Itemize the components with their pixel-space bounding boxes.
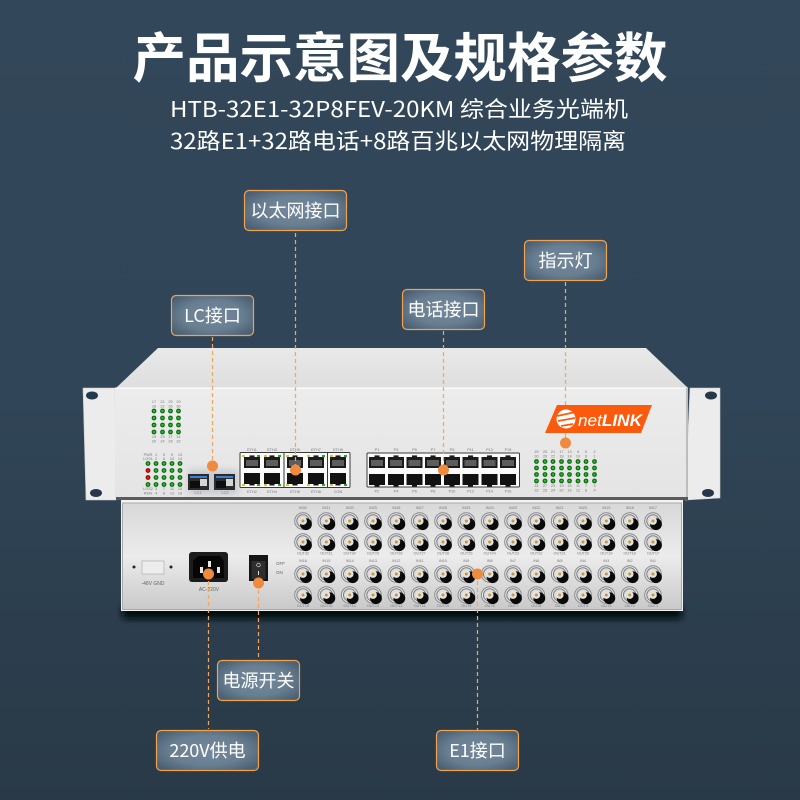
indicator group: right: 29 bbox=[534, 450, 539, 454]
indicator group: upper left: 22 bbox=[160, 404, 165, 408]
telephone ports: P5 bbox=[412, 448, 417, 452]
BNC E1 connectors: IN28 bbox=[392, 506, 400, 510]
LC optical ports: LC2 bbox=[222, 491, 228, 495]
BNC E1 connectors: IN27 bbox=[416, 506, 424, 510]
indicator group: right: 17 bbox=[559, 450, 564, 454]
indicator group: upper left: 21 bbox=[160, 400, 165, 404]
indicator group: right: 11 bbox=[576, 484, 580, 488]
indicator group: upper left: 27 bbox=[168, 435, 173, 439]
BNC E1 connectors: IN9 bbox=[463, 559, 469, 563]
BNC E1 connectors: IN25 bbox=[462, 506, 470, 510]
indicator group: upper left: 31 bbox=[176, 435, 181, 439]
indicator group: upper left: 32 bbox=[176, 440, 181, 444]
BNC E1 connectors: OUT27 bbox=[414, 552, 426, 556]
device shadow bbox=[122, 606, 682, 619]
BNC E1 connectors: IN14 bbox=[346, 559, 354, 563]
BNC E1 connectors: OUT20 bbox=[577, 552, 589, 556]
BNC E1 connectors: IN13 bbox=[369, 559, 377, 563]
ethernet ports: ETH7 bbox=[311, 448, 321, 452]
indicator group: lower left: 7 bbox=[163, 487, 165, 491]
callout: E1接口: E1接口 bbox=[449, 737, 506, 763]
indicator group: upper left: 29 bbox=[176, 400, 181, 404]
telephone ports: P8 bbox=[431, 490, 435, 494]
indicator group: right: 19 bbox=[559, 484, 564, 488]
telephone ports: P11 bbox=[467, 448, 474, 452]
BNC E1 connectors: OUT9 bbox=[461, 604, 471, 608]
indicator group: right: 7 bbox=[585, 484, 587, 488]
BNC E1 connectors: OUT15 bbox=[320, 604, 332, 608]
ethernet ports: ETH4 bbox=[267, 490, 277, 494]
callout: 电源开关: 电源开关 bbox=[222, 667, 294, 693]
leader: 电话接口 bbox=[438, 331, 449, 476]
BNC E1 connectors: IN20 bbox=[579, 506, 587, 510]
indicator group: lower left bbox=[143, 453, 182, 496]
indicator group: upper left: 30 bbox=[176, 404, 181, 408]
indicator group: right bbox=[534, 450, 597, 492]
BNC E1 connectors: IN26 bbox=[439, 506, 447, 510]
BNC E1 connectors: IN18 bbox=[626, 506, 634, 510]
indicator group: upper left: 17 bbox=[152, 400, 156, 404]
indicator group: right: 27 bbox=[543, 484, 547, 488]
telephone ports: P13 bbox=[486, 448, 493, 452]
telephone ports: P12 bbox=[467, 490, 474, 494]
BNC E1 connectors: OUT18 bbox=[624, 552, 636, 556]
BNC E1 connectors: IN32 bbox=[299, 506, 307, 510]
ethernet ports: ETH1 bbox=[247, 448, 257, 452]
AC power socket: AC-220V bbox=[199, 587, 220, 593]
BNC E1 connectors: OUT8 bbox=[485, 604, 495, 608]
indicator group: right: 30 bbox=[534, 454, 539, 458]
indicator group: lower left: 1 bbox=[155, 453, 157, 457]
ethernet ports: CON bbox=[334, 490, 342, 494]
BNC E1 connectors: OUT16 bbox=[297, 604, 309, 608]
BNC E1 connectors: IN4 bbox=[580, 559, 586, 563]
rocker switch: ON bbox=[276, 570, 283, 575]
indicator group: lower left: 14 bbox=[178, 457, 182, 461]
indicator group: right: 31 bbox=[534, 484, 539, 488]
telephone ports: P9 bbox=[450, 448, 454, 452]
BNC E1 connectors: IN22 bbox=[532, 506, 540, 510]
BNC E1 connectors: IN29 bbox=[369, 506, 377, 510]
indicator group: lower left: 9 bbox=[171, 453, 173, 457]
indicator group: right: 20 bbox=[559, 488, 564, 492]
BNC E1 connectors: IN31 bbox=[322, 506, 330, 510]
callout: 电源开关 bbox=[218, 660, 300, 700]
indicator group: upper left: 24 bbox=[160, 440, 165, 444]
BNC E1 connectors: OUT23 bbox=[507, 552, 519, 556]
ethernet ports bbox=[240, 448, 350, 494]
leader: 220V供电 bbox=[203, 568, 214, 729]
indicator group: upper left: 28 bbox=[168, 440, 173, 444]
AC power socket bbox=[189, 552, 228, 593]
LC optical ports: LC1 bbox=[195, 491, 201, 495]
subtitle: model: HTB-32E1-32P8FEV-20KM 综合业务光端机 bbox=[170, 92, 628, 124]
indicator group: right: 12 bbox=[576, 488, 580, 492]
BNC E1 connectors: IN7 bbox=[510, 559, 516, 563]
BNC E1 connectors: IN17 bbox=[649, 506, 657, 510]
indicator group: lower left: LOS2 bbox=[143, 487, 153, 491]
indicator group: lower left: 5 bbox=[163, 453, 165, 457]
BNC E1 connectors: OUT26 bbox=[437, 552, 449, 556]
indicator group: lower left: LOS1 bbox=[143, 457, 153, 461]
callout: 指示灯 bbox=[524, 240, 606, 280]
right rack ear bbox=[685, 388, 720, 500]
BNC E1 connectors: IN6 bbox=[533, 559, 539, 563]
BNC E1 connectors: OUT12 bbox=[390, 604, 402, 608]
indicator group: upper left: 20 bbox=[152, 440, 156, 444]
indicator group: right: 14 bbox=[567, 454, 572, 458]
BNC E1 connectors: OUT1 bbox=[648, 604, 658, 608]
telephone ports: P16 bbox=[505, 490, 511, 494]
BNC E1 connectors: OUT3 bbox=[601, 604, 611, 608]
callout: 电话接口: 电话接口 bbox=[408, 296, 480, 322]
telephone ports: P4 bbox=[394, 490, 398, 494]
indicator group: lower left: RUN bbox=[144, 492, 152, 496]
indicator group: right: 6 bbox=[585, 454, 587, 458]
BNC E1 connectors: OUT2 bbox=[625, 604, 635, 608]
BNC E1 connectors: OUT30 bbox=[344, 552, 356, 556]
indicator group: lower left: PWR bbox=[144, 453, 153, 457]
power terminal: -48V GND: -48V GND bbox=[141, 581, 165, 587]
BNC E1 connectors: IN2 bbox=[627, 559, 633, 563]
callout: 以太网接口 bbox=[244, 190, 346, 230]
power terminal: -48V GND bbox=[132, 561, 172, 587]
BNC E1 connectors: IN15 bbox=[322, 559, 330, 563]
device top cover bbox=[116, 348, 688, 388]
telephone ports: P7 bbox=[431, 448, 435, 452]
telephone ports: P6 bbox=[412, 490, 417, 494]
callout: 220V供电: 220V供电 bbox=[169, 737, 246, 763]
BNC E1 connectors: OUT21 bbox=[554, 552, 566, 556]
BNC E1 connectors: OUT10 bbox=[437, 604, 449, 608]
BNC E1 connectors: OUT6 bbox=[531, 604, 541, 608]
BNC E1 connectors: OUT7 bbox=[508, 604, 518, 608]
telephone ports: P15 bbox=[505, 448, 511, 452]
indicator group: right: 9 bbox=[577, 450, 579, 454]
indicator group: upper left: 18 bbox=[152, 404, 156, 408]
leader: 指示灯 bbox=[560, 282, 571, 448]
ethernet ports: ETH6 bbox=[290, 490, 300, 494]
BNC E1 connectors: OUT17 bbox=[647, 552, 659, 556]
rocker switch bbox=[249, 555, 285, 581]
indicator group: upper left bbox=[152, 400, 181, 444]
left rack ear bbox=[83, 388, 116, 500]
logo: netLINK bbox=[545, 405, 652, 433]
indicator group: lower left: 15 bbox=[178, 487, 182, 491]
BNC E1 connectors: OUT24 bbox=[484, 552, 496, 556]
indicator group: right: 1 bbox=[593, 454, 596, 458]
indicator group: upper left: 19 bbox=[152, 435, 156, 439]
rocker switch: OFF bbox=[276, 561, 285, 566]
indicator group: right: 10 bbox=[576, 454, 580, 458]
LC optical ports bbox=[188, 470, 238, 495]
indicator group: right: 26 bbox=[543, 454, 547, 458]
indicator group: lower left: 2 bbox=[155, 457, 157, 461]
front panel bbox=[115, 388, 688, 500]
leader: 电源开关 bbox=[253, 578, 264, 660]
indicator group: right: 4 bbox=[593, 488, 596, 492]
indicator group: right: 23 bbox=[551, 484, 555, 488]
leader: E1接口 bbox=[472, 568, 483, 730]
indicator group: upper left: 25 bbox=[168, 400, 173, 404]
BNC E1 connectors: OUT25 bbox=[460, 552, 472, 556]
BNC E1 connectors: OUT13 bbox=[367, 604, 379, 608]
BNC E1 connectors: OUT22 bbox=[530, 552, 542, 556]
indicator group: right: 22 bbox=[551, 454, 555, 458]
indicator group: lower left: 3 bbox=[155, 487, 157, 491]
callout: 220V供电 bbox=[156, 730, 258, 770]
BNC E1 connectors: OUT11 bbox=[414, 604, 426, 608]
logo: netLINK: netLINK bbox=[578, 411, 644, 430]
indicator group: right: 8 bbox=[585, 488, 587, 492]
indicator group: upper left: 23 bbox=[160, 435, 165, 439]
callout: E1接口 bbox=[436, 730, 518, 770]
indicator group: right: 13 bbox=[567, 450, 572, 454]
BNC E1 connectors: OUT19 bbox=[600, 552, 612, 556]
BNC E1 connectors: OUT29 bbox=[367, 552, 379, 556]
BNC E1 connectors: IN16 bbox=[299, 559, 307, 563]
BNC E1 connectors: OUT31 bbox=[320, 552, 332, 556]
subtitle: description: 32路E1+32路电话+8路百兆以太网物理隔离 bbox=[170, 124, 626, 156]
BNC E1 connectors: OUT32 bbox=[297, 552, 309, 556]
callout: LC接口 bbox=[172, 296, 254, 336]
ethernet ports: ETH5 bbox=[290, 448, 300, 452]
indicator group: right: 2 bbox=[593, 450, 596, 454]
indicator group: right: 24 bbox=[551, 488, 555, 492]
BNC E1 connectors: IN19 bbox=[602, 506, 610, 510]
ethernet ports: ETH2 bbox=[247, 490, 257, 494]
indicator group: lower left: 4 bbox=[155, 492, 157, 496]
indicator group: lower left: 11 bbox=[170, 487, 174, 491]
BNC E1 connectors: OUT14 bbox=[344, 604, 356, 608]
leader: LC接口 bbox=[207, 337, 218, 472]
indicator group: lower left: 6 bbox=[163, 457, 165, 461]
indicator group: right: 21 bbox=[551, 450, 555, 454]
BNC E1 connectors: IN5 bbox=[557, 559, 563, 563]
rear panel bbox=[116, 497, 688, 611]
BNC E1 connectors: OUT5 bbox=[555, 604, 565, 608]
callout: 以太网接口: 以太网接口 bbox=[250, 197, 340, 223]
callout: LC接口: LC接口 bbox=[184, 302, 241, 328]
BNC E1 connectors: IN10 bbox=[439, 559, 447, 563]
indicator group: upper left: 26 bbox=[168, 404, 173, 408]
indicator group: right: 16 bbox=[567, 488, 572, 492]
BNC E1 connectors: IN21 bbox=[556, 506, 564, 510]
callout: 电话接口 bbox=[402, 290, 484, 330]
leader: 以太网接口 bbox=[290, 233, 301, 476]
BNC E1 connectors: IN11 bbox=[416, 559, 424, 563]
indicator group: right: 15 bbox=[567, 484, 572, 488]
BNC E1 connectors: IN3 bbox=[603, 559, 609, 563]
BNC E1 connectors: IN1 bbox=[650, 559, 656, 563]
BNC E1 connectors: IN24 bbox=[486, 506, 494, 510]
BNC E1 connectors bbox=[295, 506, 662, 608]
BNC E1 connectors: IN12 bbox=[392, 559, 400, 563]
indicator group: lower left: 16 bbox=[178, 492, 182, 496]
title: 产品示意图及规格参数 bbox=[132, 16, 668, 93]
telephone ports: P3 bbox=[394, 448, 398, 452]
indicator group: right: 3 bbox=[593, 484, 596, 488]
telephone ports: P10 bbox=[449, 490, 455, 494]
indicator group: right: 25 bbox=[543, 450, 547, 454]
telephone ports: P14 bbox=[486, 490, 493, 494]
telephone ports: P2 bbox=[375, 490, 379, 494]
indicator group: lower left: 12 bbox=[170, 492, 174, 496]
indicator group: right: 18 bbox=[559, 454, 564, 458]
BNC E1 connectors: IN30 bbox=[346, 506, 354, 510]
device illustration bbox=[83, 348, 720, 619]
BNC E1 connectors: OUT4 bbox=[578, 604, 588, 608]
indicator group: lower left: 8 bbox=[163, 492, 165, 496]
telephone ports: P1 bbox=[375, 448, 379, 452]
ethernet ports: ETH3 bbox=[267, 448, 277, 452]
callout: 指示灯: 指示灯 bbox=[538, 247, 592, 273]
telephone ports bbox=[367, 448, 520, 494]
BNC E1 connectors: OUT28 bbox=[390, 552, 402, 556]
indicator group: right: 32 bbox=[534, 488, 539, 492]
ethernet ports: ETH9 bbox=[333, 448, 343, 452]
BNC E1 connectors: IN8 bbox=[487, 559, 493, 563]
ethernet ports: ETH8 bbox=[311, 490, 321, 494]
indicator group: lower left: 10 bbox=[170, 457, 174, 461]
indicator group: lower left: 13 bbox=[178, 453, 182, 457]
indicator group: right: 5 bbox=[585, 450, 587, 454]
BNC E1 connectors: IN23 bbox=[509, 506, 517, 510]
indicator group: right: 28 bbox=[543, 488, 547, 492]
